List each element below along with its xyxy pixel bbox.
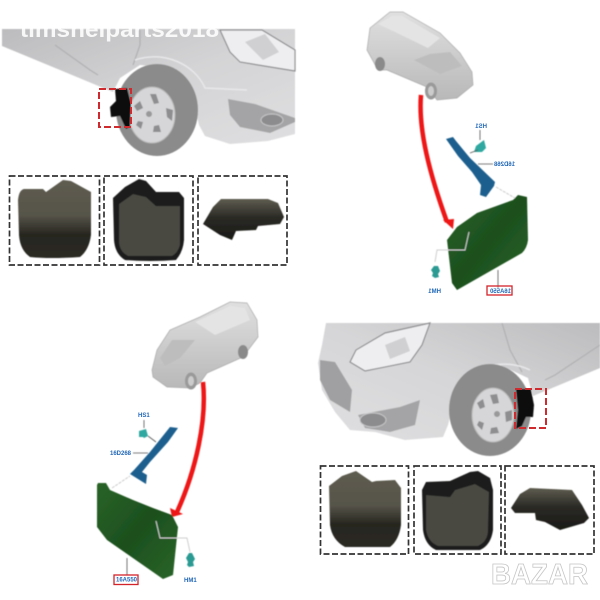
panel: front wheel photo, bottom right — [318, 323, 600, 456]
lower teal fastener — [186, 553, 195, 567]
red part number box, bottom left — [114, 575, 138, 584]
part labels, bottom left: 16D268 — [110, 451, 132, 457]
mudflap side view — [511, 488, 589, 530]
part labels, mirrored, top right: 16A550 — [489, 289, 511, 295]
dashed connection line — [112, 476, 130, 488]
mudflap side view — [203, 199, 284, 240]
dashed boxes with mudflap photos, bottom right — [320, 466, 594, 554]
watermark: BAZAR logo: BAZAR — [491, 559, 588, 591]
box 3 — [198, 176, 287, 265]
teal fastener — [474, 140, 486, 152]
headlight — [220, 30, 295, 71]
white hook line — [156, 521, 190, 552]
red part number box, top right — [487, 286, 512, 295]
green mudflap — [447, 195, 528, 290]
wheel arch edge — [135, 57, 247, 90]
black mudflap on car — [110, 88, 131, 129]
box 2 — [104, 176, 193, 265]
red dashed highlight box, bottom right — [515, 389, 546, 428]
part labels, mirrored, top right: 16D268 — [493, 162, 515, 168]
dashed connection line — [496, 187, 515, 198]
mudflap rear view — [18, 180, 91, 258]
box 3 — [505, 466, 594, 554]
tyre — [116, 64, 198, 156]
headlight — [350, 323, 430, 371]
part labels, bottom left: HM1 — [184, 578, 197, 584]
part labels, bottom left: HS1 — [138, 413, 150, 419]
box 1 — [320, 466, 408, 554]
fog lamp insert — [358, 400, 420, 432]
van illustration — [152, 302, 258, 390]
blue bracket — [446, 137, 495, 197]
black mudflap on car — [516, 389, 534, 429]
red curved arrow — [421, 95, 454, 229]
part labels, mirrored, top right — [428, 124, 515, 295]
part labels, mirrored, top right: HS1 — [475, 124, 487, 130]
part labels, mirrored, top right: HM1 — [428, 289, 441, 295]
panel: front wheel photo, top left — [2, 29, 295, 156]
part labels, bottom left: 16A550 — [116, 578, 138, 584]
panel: exploded diagram, bottom left — [97, 302, 258, 579]
part labels, bottom left — [110, 413, 197, 584]
white hook line — [435, 232, 469, 262]
fog lamp insert — [228, 99, 295, 133]
green mudflap — [97, 483, 178, 579]
red dashed highlight box, top left — [99, 89, 131, 127]
car body — [2, 29, 295, 144]
van illustration — [367, 12, 473, 100]
box 2 — [414, 466, 501, 554]
rim — [472, 388, 514, 442]
dashed boxes with mudflap photos, top left — [10, 176, 287, 265]
mudflap rear view — [329, 471, 401, 547]
box 1 — [10, 176, 100, 265]
mudflap front view — [113, 179, 184, 261]
lower teal fastener — [431, 266, 440, 278]
teal fastener — [139, 429, 148, 438]
car body — [318, 323, 600, 440]
rim — [129, 87, 175, 143]
blue bracket — [130, 427, 178, 484]
red curved arrow — [170, 382, 204, 517]
panel: exploded diagram, top right — [367, 12, 528, 290]
tyre — [449, 364, 531, 456]
watermark: timshelparts2018: timshelparts2018 — [20, 17, 219, 42]
door crease — [55, 30, 140, 75]
grille — [320, 360, 352, 412]
mudflap front view — [422, 471, 493, 550]
